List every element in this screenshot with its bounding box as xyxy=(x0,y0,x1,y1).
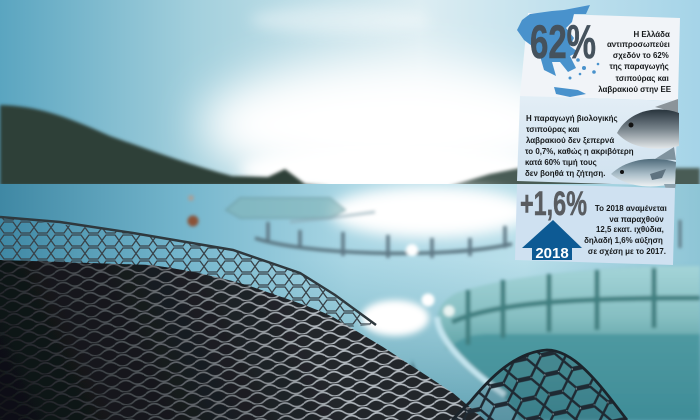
photo background: distant hills xyxy=(0,105,700,190)
panel: 2018 forecast xyxy=(515,184,675,265)
icon: map of Greece xyxy=(517,5,599,97)
icon: upward arrow with year 2018 xyxy=(522,220,582,262)
text: organic production: Η παραγωγή βιολογικής xyxy=(526,114,618,123)
text: organic production: το 0,7%, καθώς η ακριβότερη xyxy=(525,147,634,156)
icon: sea bass fish xyxy=(611,147,676,205)
text: forecast: σε σχέση με το 2017. xyxy=(588,247,666,256)
text: organic production: κατά 60% τιμή τους xyxy=(525,158,597,167)
text: Greece share: τσιπούρας και xyxy=(615,74,669,83)
fishing net: dark foreground heap xyxy=(0,260,485,420)
panel: organic production xyxy=(517,96,679,205)
text: organic production: τσιπούρας και xyxy=(526,125,579,134)
text: organic production: λαβρακιού δεν ξεπερνά xyxy=(526,136,614,145)
photo background: sky xyxy=(0,0,700,195)
text: Greece share: της παραγωγής xyxy=(609,62,669,71)
text: forecast: να παραχθούν xyxy=(609,215,664,224)
text: forecast: Το 2018 αναμένεται xyxy=(595,204,667,213)
text: forecast: 12,5 εκατ. ιχθύδια, xyxy=(596,225,664,234)
text: Greece share: λαβρακιού στην ΕΕ xyxy=(598,85,671,94)
text: Greece share: σχεδόν το 62% xyxy=(613,51,669,60)
icon: sea bream fish xyxy=(617,99,679,149)
fishing net: right corner mesh xyxy=(452,350,627,420)
text: Greece share: αντιπροσωπεύει xyxy=(607,40,670,49)
infographic card xyxy=(515,5,680,265)
panel: Greece 62 percent xyxy=(517,5,680,101)
heading: 62%: 62% xyxy=(530,15,596,68)
heading: +1,6%: +1,6% xyxy=(520,185,587,223)
label: 2018: 2018 xyxy=(535,245,569,262)
fishing net: back open mesh xyxy=(0,217,376,330)
text: forecast: δηλαδή 1,6% αύξηση xyxy=(584,236,663,245)
fish farm cages in the distance xyxy=(188,195,680,258)
text: Greece share: Η Ελλάδα xyxy=(633,30,670,39)
text: organic production: δεν βοηθά τη ζήτηση. xyxy=(525,169,605,178)
foreground: circular pool pen xyxy=(410,266,700,420)
photo background: sea xyxy=(0,184,700,420)
